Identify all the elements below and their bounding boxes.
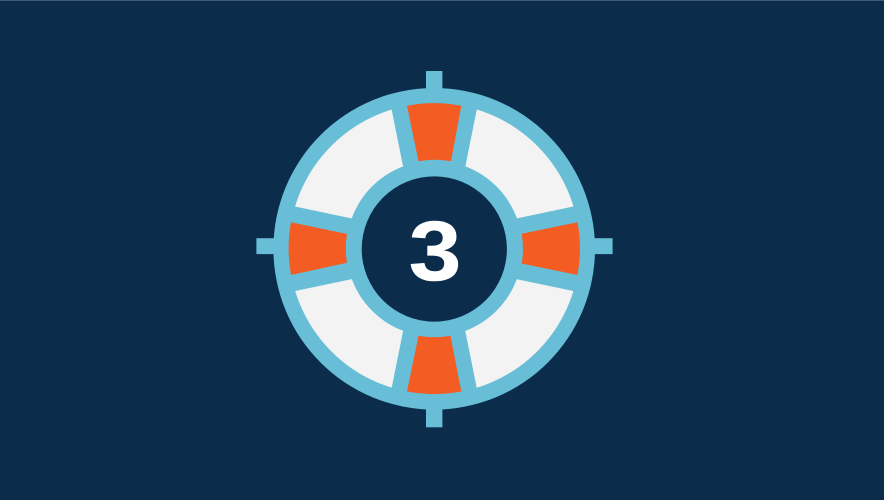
icon: lifebuoy bbox=[256, 71, 613, 427]
tick marks bbox=[256, 71, 613, 427]
outer ring bbox=[273, 88, 595, 410]
inner hole bbox=[362, 176, 507, 322]
number 3: 3 bbox=[409, 204, 461, 298]
orange segments bbox=[289, 103, 580, 394]
straps bbox=[282, 96, 586, 402]
white float band bbox=[318, 132, 551, 365]
